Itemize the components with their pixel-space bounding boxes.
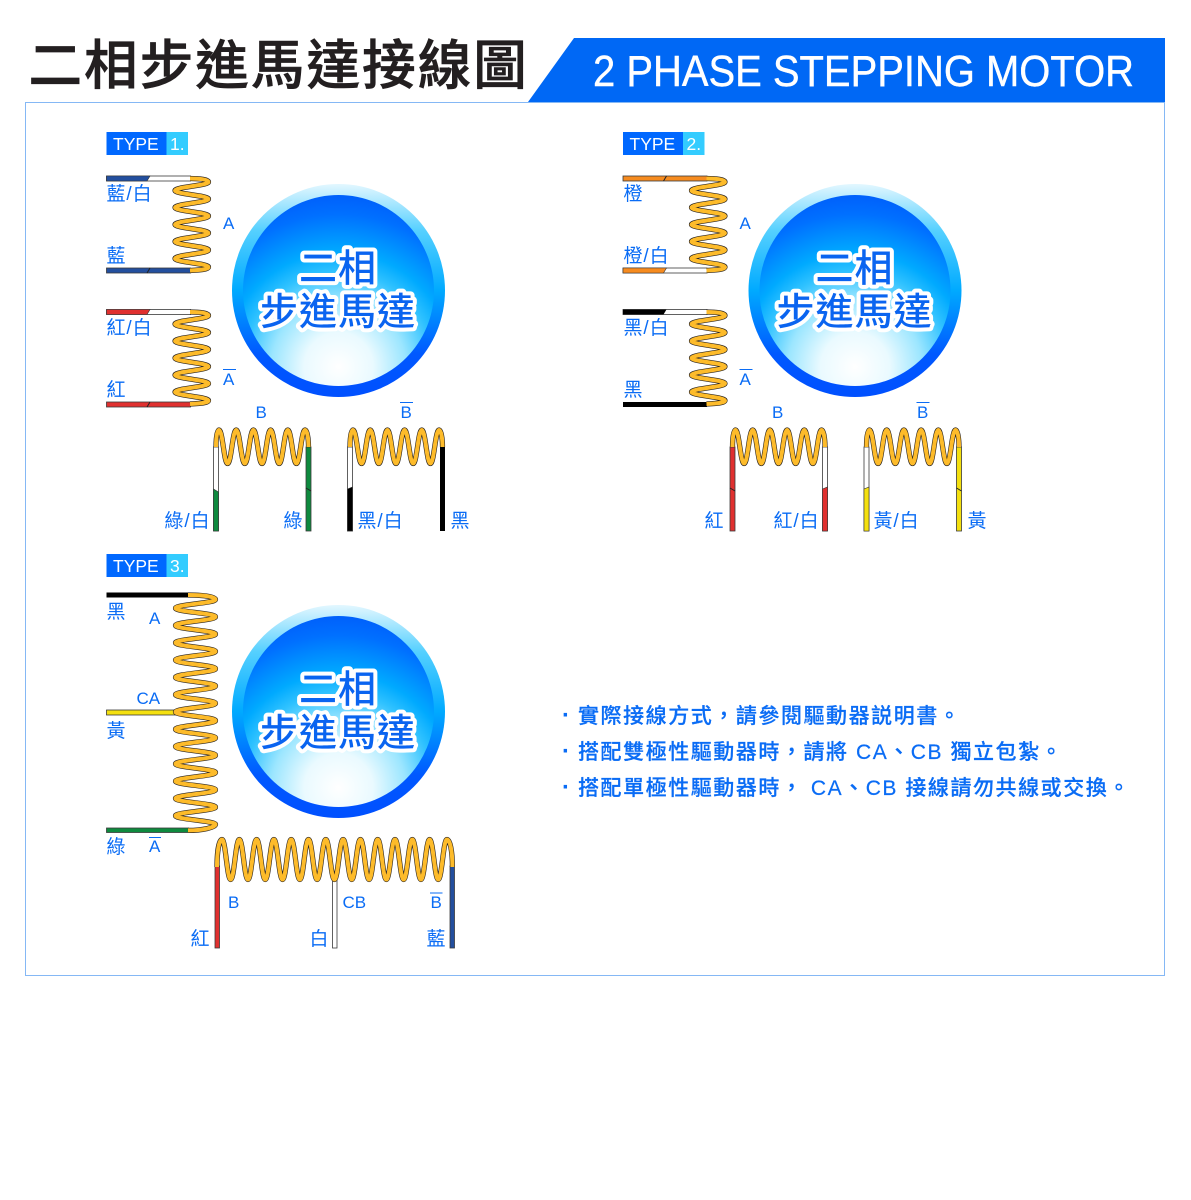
wire labels: 紅 (704, 510, 724, 532)
notes text block: 實際接線方式，請參閱驅動器説明書。 (578, 705, 961, 728)
motor circle: 步進馬達 (260, 713, 416, 755)
horizontal centre-tapped coil with wires (215, 840, 454, 948)
wire labels: 藍 (106, 245, 126, 267)
motor circle: 二相 (815, 248, 894, 290)
wire labels: 黑 (106, 602, 126, 623)
badge: type 1: 1. (170, 134, 185, 154)
notes text block: · (562, 774, 570, 801)
coil B with red wires (730, 430, 828, 531)
vertical centre-tapped coil with wires (106, 592, 216, 832)
wire labels: 綠 (284, 510, 303, 532)
wire labels: 黃 (106, 720, 126, 742)
notes text block: · (562, 702, 570, 729)
wire labels: 黑/白 (358, 510, 403, 532)
coil labels: B (430, 893, 442, 912)
panel: type 1 diagram (106, 132, 470, 532)
wire labels: 橙/白 (624, 245, 669, 267)
notes text block (562, 702, 1131, 801)
banner: english title (528, 38, 1165, 102)
wire labels: 紅 (190, 928, 210, 950)
wire labels: 黑/白 (624, 317, 669, 339)
coil labels: B (400, 403, 412, 422)
wire labels: 白 (310, 928, 329, 950)
coil labels: CB (342, 893, 366, 912)
wire labels (624, 183, 987, 532)
title: 二相步進馬達接線圖 (28, 37, 529, 96)
banner: english title: 2 PHASE STEPPING MOTOR (593, 47, 1134, 96)
coil labels: B (256, 403, 267, 422)
wire labels: 橙 (624, 183, 643, 205)
motor circle (748, 184, 962, 397)
coil labels: CA (136, 689, 161, 708)
wire labels: 黃/白 (874, 510, 919, 532)
coil labels: B (772, 403, 783, 422)
coil labels: A (740, 214, 752, 233)
panel: type 2 diagram (623, 132, 987, 532)
coil B with green wires (214, 430, 311, 531)
panel: wiring diagrams frame (26, 102, 1164, 976)
motor circle (232, 605, 445, 818)
coil labels (223, 214, 413, 422)
badge: type 3 (106, 554, 188, 577)
wire labels: 綠/白 (164, 510, 210, 532)
wire labels (106, 183, 470, 532)
wire labels: 紅/白 (106, 317, 152, 339)
badge: type 2: 2. (686, 134, 701, 154)
coil labels: A (740, 370, 752, 389)
motor circle: 二相 (299, 248, 377, 290)
wire labels: 黃 (968, 510, 987, 532)
notes text block: 搭配雙極性驅動器時，請將 CA、CB 獨立包紮。 (578, 741, 1063, 764)
coil B-bar with yellow wires (864, 430, 962, 531)
coil labels (740, 214, 930, 422)
badge: type 2: TYPE (630, 134, 675, 154)
wire labels (106, 602, 446, 950)
wire labels: 紅/白 (774, 510, 819, 532)
wire labels: 藍/白 (106, 183, 152, 205)
coil labels: B (228, 893, 239, 912)
wire labels: 藍 (426, 928, 446, 950)
coil labels (136, 609, 442, 912)
coil A with blue wires (106, 176, 208, 273)
wire labels: 綠 (106, 836, 126, 858)
motor circle: 二相 (299, 670, 377, 712)
coil labels: B (917, 403, 928, 422)
notes text block: · (562, 738, 570, 765)
badge: type 3: TYPE (113, 556, 159, 576)
coil A-bar with black wires (623, 310, 725, 407)
coil labels: A (149, 609, 161, 628)
notes text block: 搭配單極性驅動器時， CA、CB 接線請勿共線或交換。 (578, 777, 1131, 800)
motor circle: 步進馬達 (776, 292, 933, 334)
badge: type 1 (106, 132, 188, 155)
coil B-bar with black wires (348, 430, 445, 531)
badge: type 2 (623, 132, 704, 155)
coil labels: A (149, 837, 161, 856)
wire labels: 黑 (624, 380, 643, 401)
coil labels: A (223, 370, 235, 389)
motor circle (232, 184, 445, 397)
motor circle: 步進馬達 (260, 292, 416, 334)
wire labels: 黑 (450, 511, 470, 532)
coil A-bar with red wires (106, 310, 208, 407)
badge: type 1: TYPE (113, 134, 159, 154)
panel: type 3 diagram (106, 554, 454, 950)
coil A with orange wires (623, 176, 725, 273)
badge: type 3: 3. (170, 556, 185, 576)
coil labels: A (223, 214, 235, 233)
wire labels: 紅 (106, 379, 126, 401)
